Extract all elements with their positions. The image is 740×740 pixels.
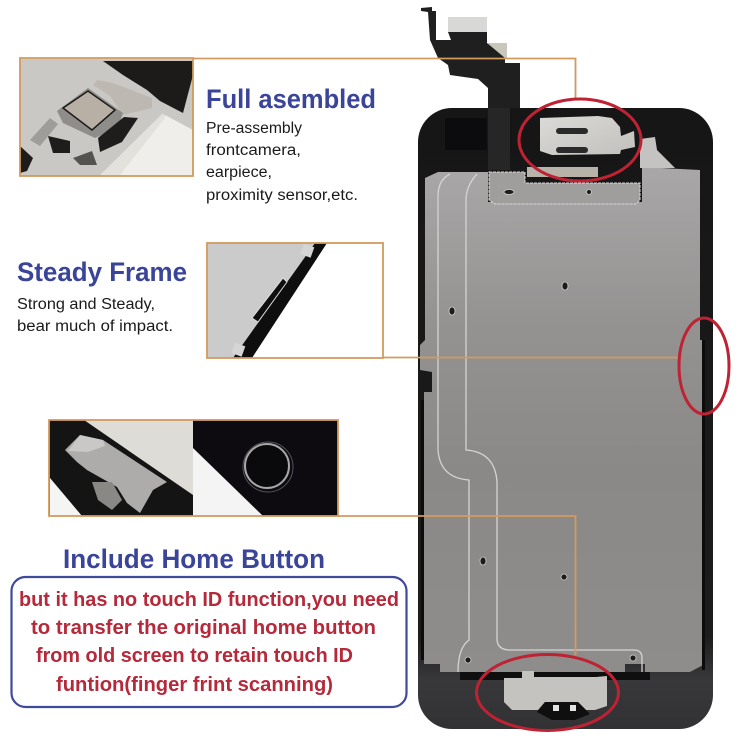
camera recess (445, 118, 487, 150)
heading: include home button: Include Home Button (63, 544, 325, 574)
text block: steady frame details: bear much of impact. (17, 318, 173, 335)
panel: frame photo (207, 243, 383, 358)
side tab (640, 137, 675, 168)
callout box: touch ID warning: from old screen to retain touch ID (36, 645, 353, 667)
panel: earpiece photo (20, 58, 193, 176)
panel: home button photos (49, 420, 338, 516)
flex cable inside the body (488, 108, 510, 170)
callout box: touch ID warning: to transfer the original home button (31, 617, 376, 639)
shield inset panel (489, 172, 640, 204)
home button bracket (460, 671, 650, 720)
shield holes (449, 190, 636, 663)
earpiece bracket (540, 116, 635, 155)
text block: steady frame details: Strong and Steady, (17, 296, 155, 313)
text block: full assembled details: proximity sensor,etc. (206, 187, 358, 204)
phone screen assembly (418, 7, 713, 729)
text block: full assembled details (206, 120, 358, 204)
top bar bracket (527, 167, 598, 177)
text block: full assembled details: frontcamera, (206, 142, 301, 159)
metal shield plate (420, 167, 705, 672)
phone body (418, 108, 713, 729)
text block: full assembled details: earpiece, (206, 164, 272, 181)
callout box: touch ID warning: funtion(finger frint scanning) (56, 674, 333, 696)
callout box: touch ID warning: but it has no touch ID function,you need (19, 589, 399, 611)
callout box: touch ID warning (12, 577, 406, 707)
heading: steady frame: Steady Frame (17, 257, 187, 287)
text block: full assembled details: Pre-assembly (206, 120, 302, 137)
flex cable (421, 7, 520, 170)
shield seams (438, 174, 642, 672)
heading: full assembled: Full asembled (206, 84, 376, 114)
side rails (421, 340, 705, 670)
text block: steady frame details (17, 296, 173, 335)
callout lines (193, 58, 679, 655)
red highlight ellipses (476, 99, 729, 730)
